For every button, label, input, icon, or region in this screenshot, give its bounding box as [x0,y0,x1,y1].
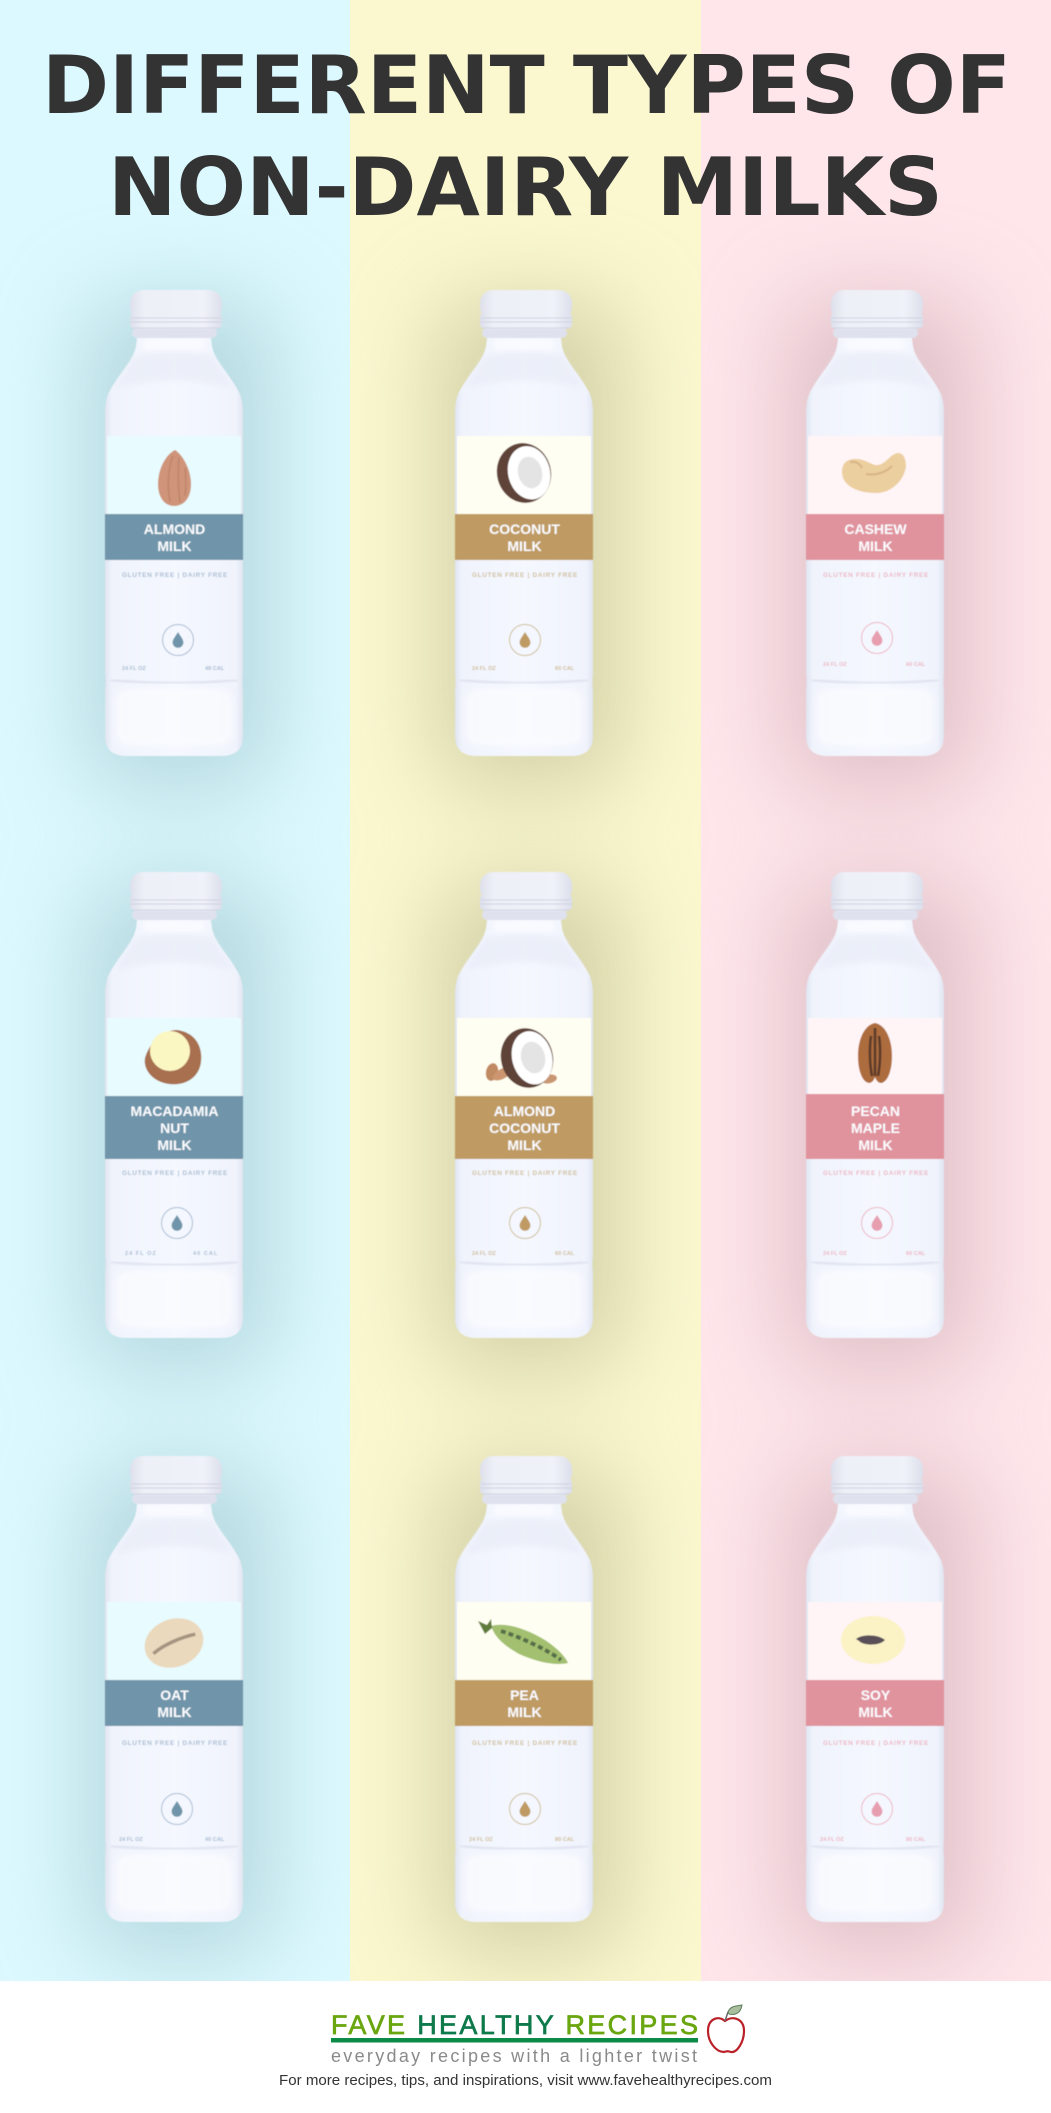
name text: COCONUT [489,1120,560,1136]
bottle: pea milk [455,1456,593,1922]
label panel [457,1602,591,1680]
name text: MACADAMIA [131,1103,218,1119]
volume text: 24 FL OZ [823,662,847,668]
claims text: GLUTEN FREE | DAIRY FREE [472,1170,578,1177]
name text: MILK [157,538,192,554]
label panel [457,436,591,514]
icon: milk drop [510,1208,540,1238]
bottle: almond coconut milk [455,872,593,1338]
name band [455,1096,593,1159]
volume text: 24 FL OZ [472,666,496,672]
logo underline [331,2038,698,2042]
volume text: 24 FL OZ [122,666,146,672]
claims text: GLUTEN FREE | DAIRY FREE [823,1170,929,1177]
icon: milk drop [162,1794,192,1824]
name text: MILK [507,1137,542,1153]
label panel [808,1018,942,1094]
icon: soybean [841,1616,905,1664]
claims text: GLUTEN FREE | DAIRY FREE [122,1170,228,1177]
name text: MILK [858,1704,893,1720]
calories text: 48 CAL [205,666,225,672]
icon: milk drop [510,1794,540,1824]
name text: PECAN [851,1103,900,1119]
name text: MILK [507,538,542,554]
claims text: GLUTEN FREE | DAIRY FREE [122,572,228,579]
claims text: GLUTEN FREE | DAIRY FREE [472,572,578,579]
volume text: 24 FL OZ [125,1251,157,1257]
bottle: almond milk [105,290,243,756]
bottle: pecan maple milk [806,872,944,1338]
title [42,39,1011,234]
calories text: 40 CAL [205,1837,225,1843]
background: yellow column [350,0,701,1981]
label panel [107,1018,241,1096]
name band [105,514,243,560]
icon: milk drop [862,622,892,654]
icon: pea pod [478,1619,568,1664]
bottle: oat milk [105,1456,243,1922]
icon: milk drop [162,624,194,656]
logo tagline: everyday recipes with a lighter twist [331,2046,697,2066]
title: DIFFERENT TYPES OF [42,39,1011,132]
name text: MAPLE [851,1120,900,1136]
name text: SOY [861,1687,890,1703]
icon: milk drop [510,624,540,656]
background: blue column [0,0,350,1981]
icon: milk drop [862,1208,892,1238]
name text: MILK [858,1137,893,1153]
icon: pecan [858,1023,892,1083]
calories text: 60 CAL [555,1251,575,1257]
icon: almond [158,450,191,506]
label panel [457,1018,591,1096]
label panel [107,1602,241,1680]
bottle: cashew milk [806,290,944,756]
name text: PEA [510,1687,539,1703]
label panel [107,436,241,514]
claims text: GLUTEN FREE | DAIRY FREE [122,1740,228,1747]
icon: macadamia nut [145,1030,201,1084]
bottle shadows: yellow column [435,300,623,1956]
name text: ALMOND [144,521,205,537]
name band [806,514,944,560]
claims text: GLUTEN FREE | DAIRY FREE [823,1740,929,1747]
bottle shadows: blue column [85,300,273,1956]
claims text: GLUTEN FREE | DAIRY FREE [823,572,929,579]
calories text: 40 CAL [193,1251,218,1257]
name text: MILK [507,1704,542,1720]
icon: oat [138,1610,210,1676]
name band [455,1680,593,1726]
bottle shadows: pink column [786,300,974,1956]
icon: milk drop [162,1208,192,1238]
claims text: GLUTEN FREE | DAIRY FREE [472,1740,578,1747]
footer logo wordmark: FAVE HEALTHY RECIPES [331,2010,698,2040]
volume text: 24 FL OZ [823,1251,847,1257]
icon: apple [708,2005,744,2052]
name band [806,1680,944,1726]
calories text: 80 CAL [906,1837,926,1843]
name band [105,1680,243,1726]
footer website line: For more recipes, tips, and inspirations, visit www.favehealthyrecipes.com [279,2073,772,2089]
calories text: 80 CAL [555,1837,575,1843]
name band [105,1096,243,1159]
name text: MILK [157,1137,192,1153]
label panel [808,1602,942,1680]
name band [806,1094,944,1159]
volume text: 24 FL OZ [820,1837,844,1843]
footer background [0,1981,1051,2113]
name text: MILK [157,1704,192,1720]
calories text: 60 CAL [906,1251,926,1257]
name text: COCONUT [489,521,560,537]
background: pink column [701,0,1051,1981]
bottle: coconut milk [455,290,593,756]
name text: CASHEW [844,521,907,537]
calories text: 60 CAL [906,662,926,668]
name band [455,514,593,560]
name text: ALMOND [494,1103,555,1119]
icon: cashew [842,453,906,493]
name text: MILK [858,538,893,554]
volume text: 24 FL OZ [472,1251,496,1257]
bottle: soy milk [806,1456,944,1922]
icon: almonds and coconut [484,1023,559,1093]
name text: NUT [160,1120,189,1136]
calories text: 60 CAL [555,666,575,672]
icon: milk drop [862,1794,892,1824]
bottle: macadamia nut milk [105,872,243,1338]
volume text: 24 FL OZ [119,1837,143,1843]
volume text: 24 FL OZ [469,1837,493,1843]
label panel [808,436,942,514]
icon: coconut [491,437,557,509]
name text: OAT [160,1687,189,1703]
title: NON-DAIRY MILKS [108,141,943,234]
